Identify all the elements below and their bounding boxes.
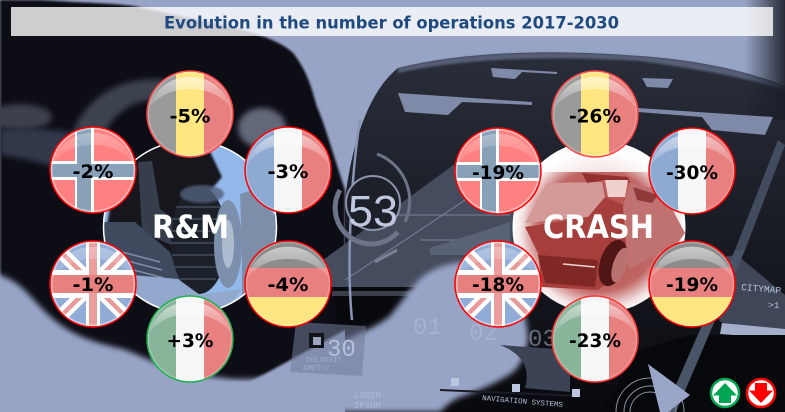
flag: United Kingdom -1%: [50, 241, 136, 327]
background hud text: 01: [413, 315, 442, 342]
central photo: mechanic with tyre: [102, 145, 278, 308]
background hud text: CITYMAP: [741, 282, 782, 296]
title: Evolution in the number of operations 2017-2030: [164, 13, 619, 33]
background hud text: 03: [528, 327, 557, 354]
flag: France -30%: [649, 128, 735, 214]
background hud text: IPSUM: [354, 401, 381, 411]
flag: Norway -19%: [455, 128, 541, 214]
flag: Norway -2%: -2%: [72, 161, 114, 183]
flag: Norway -19%: -19%: [472, 162, 524, 184]
background hud text: DOLORSIT: [306, 357, 343, 365]
background hud text: LOREM: [354, 391, 381, 401]
icon: red down arrow: [747, 379, 775, 407]
flag: United Kingdom -18%: [455, 241, 541, 327]
background hud text: [303, 282, 782, 411]
icon: green up arrow: [711, 379, 739, 407]
background hud text: NAVIGATION SYSTEMS: [482, 395, 564, 410]
flag: Italy +3%: [147, 296, 233, 382]
speedometer readout: 53: [348, 187, 398, 236]
flag: Italy +3%: +3%: [166, 330, 214, 352]
background hud text: >1: [768, 300, 780, 311]
flag: France -3%: [245, 127, 331, 213]
flag: Germany -19%: [649, 241, 735, 327]
background hud text: 02: [469, 321, 498, 348]
label: R&M: R&M: [152, 208, 229, 246]
flag: Italy -23%: [552, 296, 638, 382]
title banner: [11, 7, 773, 36]
label: CRASH: CRASH: [543, 208, 654, 246]
flag: United Kingdom -18%: -18%: [472, 274, 524, 296]
panel: CRASH: [455, 71, 735, 382]
flag: France -30%: -30%: [666, 162, 718, 184]
flag: Germany -4%: -4%: [268, 274, 308, 296]
central photo: crashed car: [512, 144, 686, 309]
flag: Belgium -5%: [147, 71, 233, 157]
flag: Italy -23%: -23%: [569, 330, 621, 352]
flag: Germany -19%: -19%: [666, 274, 718, 296]
flag: Norway -2%: [50, 127, 136, 213]
background hud text: 30: [327, 337, 356, 364]
panel: R&M: [50, 71, 331, 382]
flag: Belgium -5%: -5%: [170, 106, 210, 128]
flag: France -3%: -3%: [268, 161, 308, 183]
speedometer readout: [335, 120, 410, 320]
flag: Belgium -26%: [552, 71, 638, 157]
flag: Belgium -26%: -26%: [569, 106, 621, 128]
flag: United Kingdom -1%: -1%: [72, 274, 114, 296]
flag: Germany -4%: [245, 241, 331, 327]
background hud text: AMET//: [303, 365, 331, 373]
